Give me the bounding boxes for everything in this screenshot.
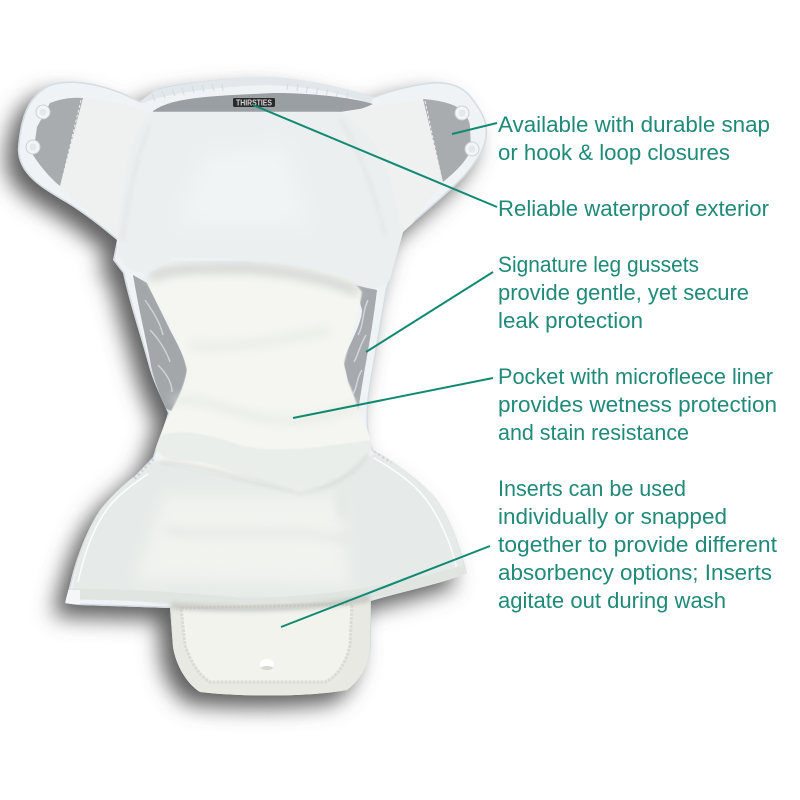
callout: inserts — [498, 476, 777, 613]
shell edge tone — [18, 77, 487, 696]
wing fleece panels — [117, 108, 415, 246]
leader line: pocket liner — [293, 378, 493, 418]
callout: pocket liner: Pocket with microfleece liner — [498, 364, 773, 389]
insert snap — [260, 659, 274, 667]
brand label: THIRSTIES — [236, 98, 273, 108]
flap bottom roll — [70, 570, 466, 603]
callout: pocket liner: provides wetness protection — [498, 392, 777, 417]
leader line: inserts — [281, 546, 490, 627]
right stitching — [425, 101, 442, 180]
callout: waterproof exterior: Reliable waterproof exterior — [498, 196, 769, 221]
insert inner terry — [181, 604, 352, 682]
right closure panel — [423, 99, 471, 182]
leader line: leg gussets — [366, 272, 493, 352]
callout: inserts: agitate out during wash — [498, 588, 726, 613]
callout: inserts: Inserts can be used — [498, 476, 686, 501]
waistband elastic — [140, 81, 372, 101]
front side elastic — [133, 458, 152, 478]
insert tab — [171, 598, 370, 696]
callout: leg gussets: Signature leg gussets — [498, 252, 699, 277]
diaper photo illustration — [6, 77, 487, 708]
callout: inserts: individually or snapped — [498, 504, 727, 529]
right wing snaps — [455, 106, 479, 156]
flap bottom left corner tag — [66, 590, 80, 604]
left stitching — [61, 100, 81, 184]
pocket folds — [170, 392, 360, 408]
callout: leg gussets: provide gentle, yet secure — [498, 280, 749, 305]
callout: closures: or hook & loop closures — [498, 140, 730, 165]
mid fleece fold — [153, 432, 372, 492]
upper fleece fold — [153, 111, 400, 289]
flap piping — [78, 458, 458, 582]
top gray exterior band — [153, 93, 373, 114]
fold shadow under upper fleece — [150, 268, 358, 292]
wing fleece soft seams — [122, 118, 385, 240]
callout: pocket liner — [498, 364, 777, 445]
flap center fleece — [146, 493, 342, 579]
callout: leg gussets: leak protection — [498, 308, 643, 333]
diaper outer shell — [18, 77, 487, 696]
callout: pocket liner: and stain resistance — [498, 420, 689, 445]
callout: inserts: absorbency options; Inserts — [498, 560, 772, 585]
callout: inserts: together to provide different — [498, 532, 777, 557]
callout: leg gussets — [498, 252, 749, 333]
insert shading — [171, 595, 370, 612]
leader line: waterproof exterior — [253, 105, 497, 207]
leader line: closures — [452, 123, 497, 134]
upper fleece soft highlight — [175, 145, 310, 225]
callout: closures: Available with durable snap — [498, 112, 770, 137]
right leg gusset — [343, 285, 377, 412]
left leg gusset — [133, 275, 187, 412]
callout: closures — [498, 112, 770, 165]
central pocket liner — [146, 283, 371, 446]
left closure panel — [33, 98, 83, 186]
front flap — [72, 452, 466, 606]
drop shadow — [6, 89, 475, 708]
left wing snaps — [26, 105, 50, 154]
mid fold shadow — [160, 456, 368, 490]
